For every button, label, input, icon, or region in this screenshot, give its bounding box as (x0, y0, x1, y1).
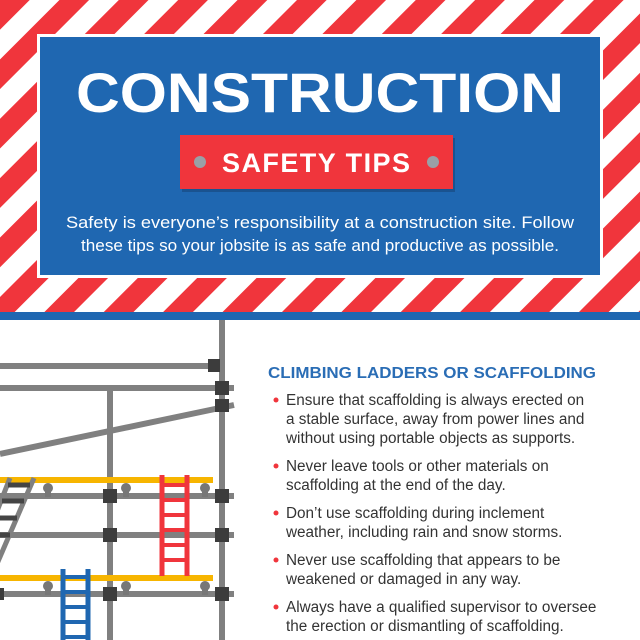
intro text: Safety is everyone’s responsibility at a construction site. Follow (66, 214, 574, 232)
bullet list: weather, including rain and snow storms. (285, 524, 562, 541)
bullet list: weakened or damaged in any way. (285, 571, 521, 588)
blue ladder (63, 569, 88, 640)
gray diagonal ladder (0, 478, 34, 580)
intro text (66, 214, 574, 255)
header blue panel (37, 34, 603, 278)
scaffolding illustration (0, 320, 234, 640)
bullet list: Never use scaffolding that appears to be (286, 552, 560, 569)
bullet list: the erection or dismantling of scaffolding. (286, 618, 564, 635)
header stripes background (0, 0, 640, 312)
bullet list: Don’t use scaffolding during inclement (286, 505, 545, 522)
divider bar (0, 312, 640, 320)
planks (0, 477, 213, 581)
intro text: these tips so your jobsite is as safe and productive as possible. (81, 237, 559, 255)
bullet list: Ensure that scaffolding is always erected on (286, 392, 584, 409)
bullet list: Always have a qualified supervisor to oversee (286, 599, 596, 616)
clamps (43, 483, 210, 595)
subtitle badge: SAFETY TIPS (222, 148, 410, 178)
bullet list: without using portable objects as supports. (285, 430, 575, 447)
subtitle badge (180, 135, 455, 192)
section heading: CLIMBING LADDERS OR SCAFFOLDING (268, 365, 596, 382)
red ladder (162, 475, 187, 576)
bullet list: Never leave tools or other materials on (286, 458, 549, 475)
bullet list: scaffolding at the end of the day. (286, 477, 506, 494)
bullet list: a stable surface, away from power lines and (286, 411, 584, 428)
title: CONSTRUCTION (76, 61, 564, 124)
bullet list (274, 392, 596, 635)
